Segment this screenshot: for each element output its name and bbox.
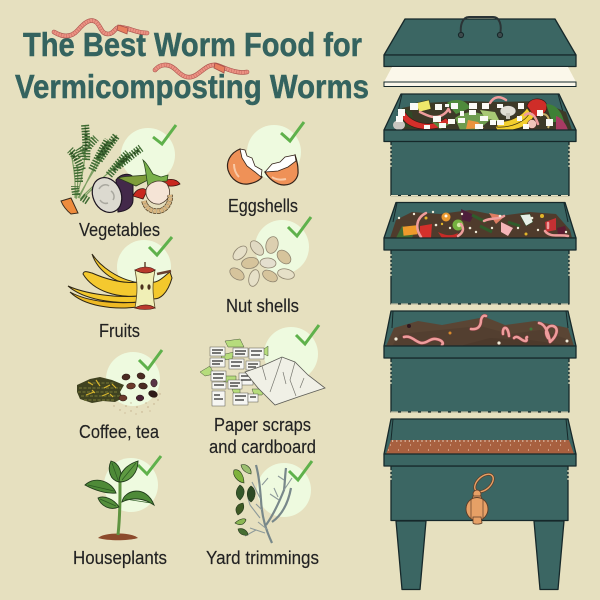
icon: worm on first title line [54, 21, 147, 36]
title: Vermicomposting Worms [15, 68, 369, 105]
item: coffee, tea: Coffee, tea [79, 422, 160, 442]
bin lid [384, 17, 576, 66]
tray 1: fresh food [384, 94, 576, 196]
item: vegetables [61, 124, 180, 240]
item: yard trimmings: Yard trimmings [206, 548, 319, 568]
item: fruits: Fruits [99, 321, 140, 341]
item: fruits [68, 237, 172, 341]
item: paper scraps and cardboard: Paper scraps [214, 415, 311, 435]
paper liner [384, 67, 576, 86]
item: nut shells [226, 217, 311, 316]
title [15, 26, 369, 105]
worm tea layer [386, 440, 574, 454]
tray 4: base with liquid collector [384, 419, 576, 520]
item: houseplants: Houseplants [73, 548, 167, 568]
item: eggshells [228, 122, 304, 216]
item: paper scraps and cardboard [200, 325, 325, 457]
item: houseplants [73, 456, 167, 568]
tap [466, 471, 497, 524]
item: paper scraps and cardboard: and cardboard [209, 437, 316, 457]
tray 3: compost with worms [384, 311, 576, 412]
worm bin [384, 17, 576, 590]
tray 2: partly composted food [384, 202, 576, 304]
item: coffee, tea [77, 350, 162, 442]
title: The Best Worm Food for [23, 26, 362, 63]
item: vegetables: Vegetables [79, 220, 160, 240]
item: eggshells: Eggshells [228, 196, 298, 216]
item: yard trimmings [206, 461, 319, 568]
icon: worm on second title line [155, 63, 247, 77]
bin legs [396, 521, 564, 590]
item: nut shells: Nut shells [226, 296, 299, 316]
